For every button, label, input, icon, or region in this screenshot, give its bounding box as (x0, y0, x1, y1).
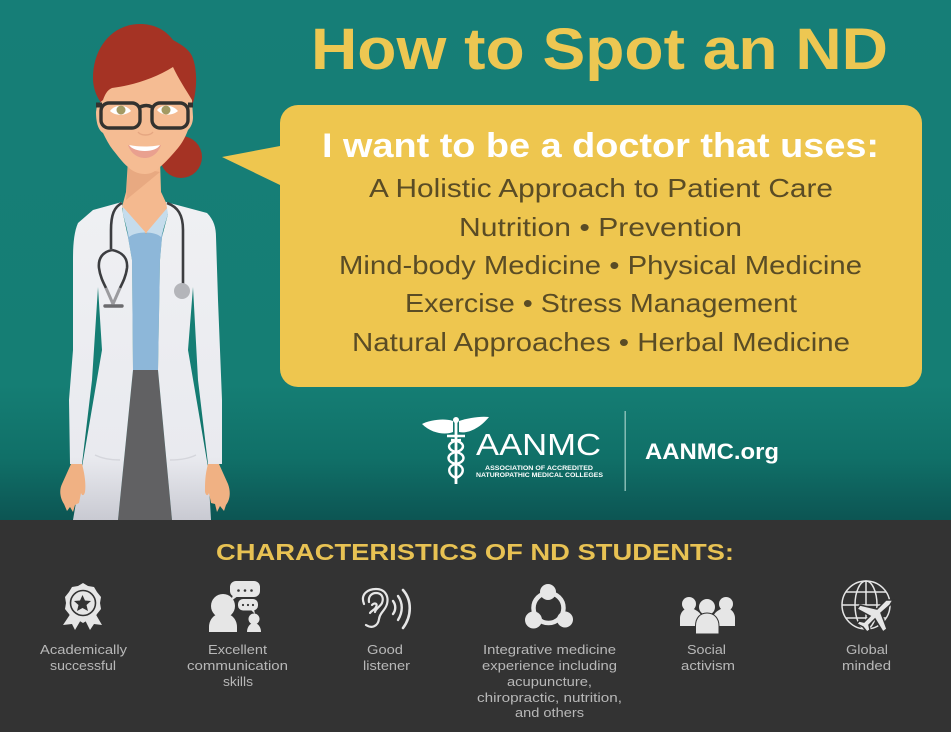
label: experience including (482, 658, 617, 673)
logo divider (624, 411, 626, 491)
label: Global (846, 642, 888, 657)
logo: AANMC (422, 417, 604, 484)
glasses (96, 103, 193, 128)
mouth (128, 145, 161, 158)
label: listener (363, 658, 411, 673)
icon: connected circles (525, 584, 573, 628)
eyes (110, 106, 131, 115)
right hand (205, 464, 230, 512)
bubble list: Natural Approaches • Herbal Medicine (352, 327, 850, 357)
icon: group of people (680, 597, 735, 634)
logo subtitle: ASSOCIATION OF ACCREDITED (485, 465, 593, 472)
label: chiropractic, nutrition, (477, 690, 622, 705)
bubble list: A Holistic Approach to Patient Care (369, 173, 833, 203)
label (477, 642, 622, 720)
stethoscope (99, 203, 183, 306)
teal background (0, 0, 951, 520)
label: successful (50, 658, 116, 673)
label: minded (842, 658, 891, 673)
item: integrative medicine (477, 584, 622, 720)
website: AANMC.org (645, 439, 779, 464)
hair bun (160, 136, 202, 178)
label: skills (223, 674, 254, 689)
hair (93, 24, 196, 106)
label: communication (187, 658, 288, 673)
item: good listener (363, 589, 411, 673)
neck (122, 160, 168, 234)
dark panel background (0, 520, 951, 732)
icon: ear with sound waves (363, 589, 410, 628)
label: acupuncture, (507, 674, 592, 689)
label (842, 642, 891, 673)
logo wordmark: AANMC (476, 427, 601, 462)
left hand (60, 464, 85, 512)
bubble list: Exercise • Stress Management (405, 288, 798, 318)
bubble list: Nutrition • Prevention (459, 212, 742, 242)
label: and others (515, 705, 585, 720)
label: Good (367, 642, 403, 657)
bubble list: Mind-body Medicine • Physical Medicine (339, 250, 862, 280)
panel: speech bubble (222, 105, 922, 387)
icon: globe and plane (842, 581, 893, 632)
nose (138, 132, 153, 135)
label (40, 642, 128, 673)
label: Excellent (208, 642, 267, 657)
label (681, 642, 735, 673)
label: activism (681, 658, 735, 673)
title: How to Spot an ND (311, 17, 888, 82)
label: Academically (40, 642, 128, 657)
panel: characteristics (0, 520, 951, 732)
neck base (123, 192, 168, 233)
panel heading: CHARACTERISTICS OF ND STUDENTS: (216, 539, 734, 565)
label (187, 642, 288, 689)
coat pockets (95, 455, 196, 460)
item: global minded (842, 581, 893, 673)
bubble shape (222, 105, 922, 387)
skirt (118, 370, 172, 520)
label: Integrative medicine (483, 642, 616, 657)
item: academically successful (40, 583, 128, 673)
icon: caduceus (422, 417, 489, 484)
logo subtitle: NATUROPATHIC MEDICAL COLLEGES (476, 472, 604, 479)
doctor illustration (60, 24, 230, 520)
item: social activism (680, 597, 735, 673)
shirt collar (123, 205, 168, 237)
stethoscope chest piece (174, 283, 190, 299)
icon: award rosette (63, 583, 102, 630)
face (96, 67, 193, 174)
label: Social (687, 642, 726, 657)
bubble list (339, 173, 862, 357)
icon: people talking (209, 581, 261, 632)
logo subtitle (476, 465, 604, 479)
label (363, 642, 411, 673)
lab coat (69, 202, 133, 520)
bubble heading: I want to be a doctor that uses: (322, 127, 879, 165)
item: communication skills (187, 581, 288, 689)
neck shadow (126, 166, 160, 200)
shirt (124, 208, 167, 370)
